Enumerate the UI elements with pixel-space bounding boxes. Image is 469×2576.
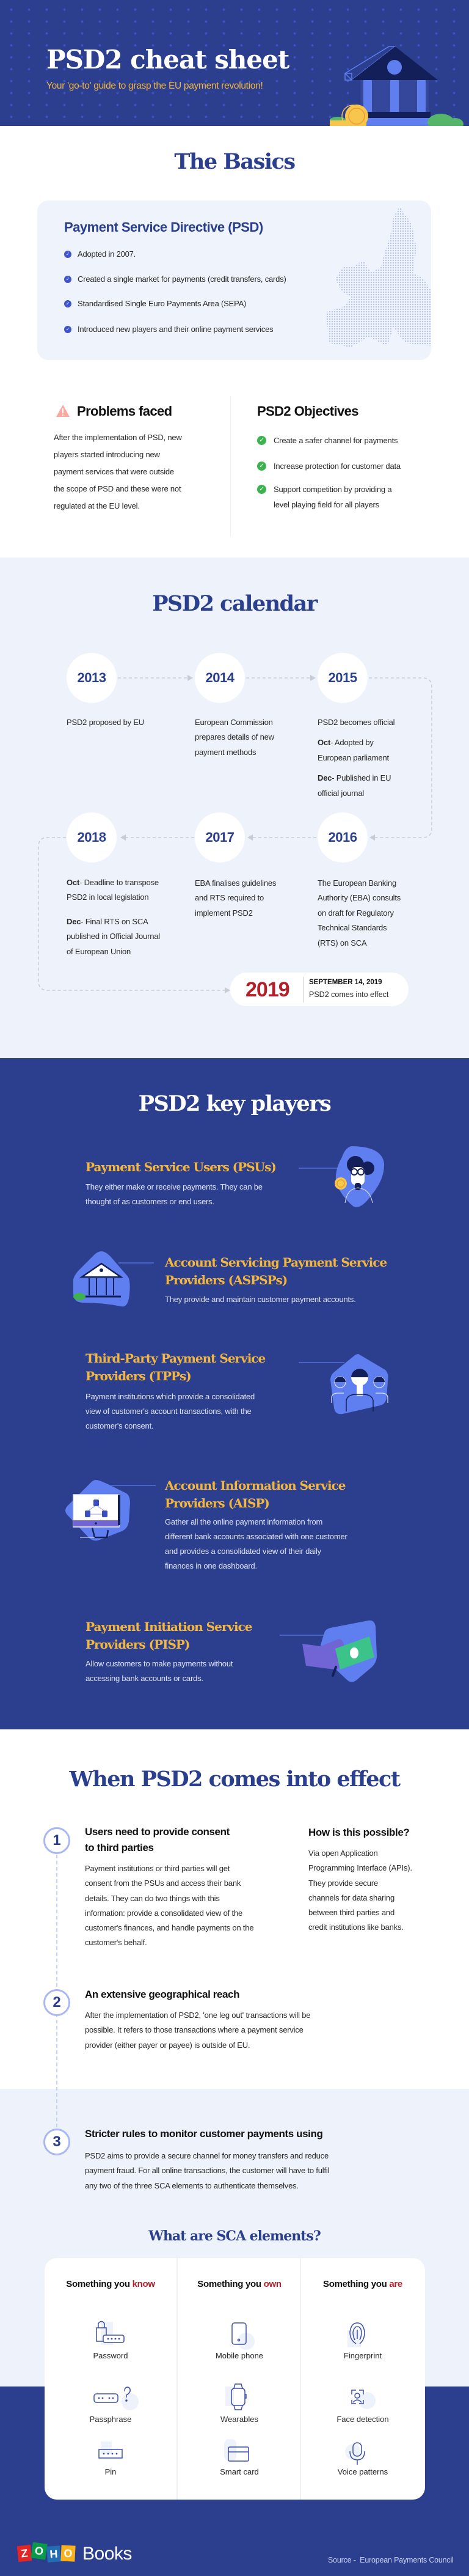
player: PISP: accessing bank accounts or cards.	[85, 1674, 203, 1683]
panel: PSD: ✓	[66, 301, 70, 306]
step 3	[43, 2128, 329, 2190]
password	[101, 2322, 113, 2345]
player: ASPSP	[73, 1251, 387, 1307]
panel: problems faced	[54, 403, 182, 510]
timeline connectors	[38, 675, 432, 993]
panel: PSD	[37, 201, 431, 360]
year 2015: 2015	[329, 670, 357, 685]
player: AISP: different bank accounts associated with one customer	[165, 1532, 347, 1541]
fingerprint	[347, 2330, 361, 2347]
section background: light lower	[0, 2089, 469, 2386]
objectives list	[257, 436, 401, 509]
text 2014: prepares details of new	[195, 732, 274, 742]
text 2018: PSD2 in local legislation Dec- Final RTS on SCA	[67, 892, 148, 926]
player: PSU: They either make or receive payments. They can be	[85, 1182, 263, 1191]
step 1: Payment institutions or third parties will get	[85, 1864, 230, 1873]
player: TPP	[85, 1351, 388, 1430]
text 2017: EBA finalises guidelines	[195, 878, 276, 888]
text: problems: After the implementation of PSD, new	[54, 433, 182, 442]
text 2018	[67, 878, 160, 956]
icon: monitor with network	[65, 1480, 130, 1540]
step 1: information: provide a consolidated view of the	[85, 1908, 242, 1918]
player: AISP: Providers (AISP)	[165, 1496, 269, 1511]
icon: dotted europe map	[327, 208, 431, 347]
footer band	[0, 2386, 469, 2576]
player: PISP: Allow customers to make payments without	[85, 1659, 233, 1668]
callout: how is this possible: They provide secure	[308, 1879, 378, 1888]
column: own: Something you own	[197, 2279, 282, 2289]
heading: when PSD2 comes into effect: When PSD2 comes into effect	[69, 1767, 400, 1792]
source note: Source - European Payments Council	[328, 2556, 454, 2564]
panel: PSD2 objectives: level playing field for all players	[274, 500, 379, 509]
callout: 2019: PSD2 comes into effect	[309, 990, 388, 999]
icon: warning	[56, 405, 70, 417]
player: AISP: Gather all the online payment information from	[165, 1517, 322, 1526]
heading: The Basics: The Basics	[174, 149, 295, 174]
text 2018: Oct- Deadline to transpose	[67, 878, 159, 887]
callout: how is this possible: Via open Application	[308, 1849, 378, 1858]
panel: PSD2 objectives: Increase protection for customer data	[274, 462, 401, 471]
panel: SCA elements card: Voice patterns	[338, 2467, 388, 2476]
year 2013	[67, 653, 117, 703]
face	[358, 2392, 376, 2409]
player: TPP: view of customer's account transactions, with the	[85, 1407, 252, 1416]
panel: SCA elements card: Passphrase	[90, 2415, 131, 2424]
text: problems: the scope of PSD and these were not	[54, 484, 181, 493]
step 3: any two of the three SCA elements to authenticate themselves.	[85, 2181, 299, 2190]
step 1: Users need to provide consent	[85, 1826, 230, 1838]
player: ASPSP: Providers (ASPSPs)	[165, 1273, 287, 1287]
heading: objectives: PSD2 Objectives	[257, 403, 358, 419]
panel: SCA elements card: Pin	[105, 2467, 116, 2476]
section: key players: customer's consent.	[85, 1421, 153, 1430]
PSD bullet list	[64, 249, 286, 334]
heading: what are SCA elements: What are SCA elements?	[148, 2228, 321, 2244]
player: PSU: thought of as customers or end users.	[85, 1197, 214, 1206]
text: problems: regulated at the EU level.	[54, 501, 140, 510]
callout: how is this possible: credit institutions like banks.	[308, 1923, 404, 1932]
heading: problems faced: Problems faced	[77, 403, 172, 419]
callout: 2019: SEPTEMBER 14, 2019	[309, 979, 382, 986]
logo: Zoho Books	[17, 2542, 132, 2564]
section: PSD2 calendar	[0, 558, 469, 1058]
voice	[345, 2444, 361, 2460]
wearable	[225, 2386, 234, 2406]
text 2017: implement PSD2	[195, 908, 253, 918]
dashed timeline	[56, 1855, 57, 2127]
icon: bank blob	[73, 1251, 130, 1307]
step 2	[43, 1989, 310, 2050]
text: problems: players started introducing new	[54, 450, 160, 459]
panel: PSD2 objectives: ✓	[259, 463, 264, 469]
panel: PSD: ✓	[66, 251, 70, 257]
year 2017: 2017	[206, 830, 234, 845]
text 2015: official journal	[318, 789, 364, 798]
heading: key players: PSD2 key players	[139, 1091, 330, 1116]
text 2018: of European Union	[67, 947, 131, 956]
year 2018	[67, 812, 117, 863]
text 2014: European Commission	[195, 718, 273, 727]
player: PISP	[85, 1619, 377, 1683]
text: problems	[54, 433, 182, 510]
year 2013: 2013	[78, 670, 106, 685]
year 2016	[318, 812, 368, 863]
panel: PSD: Standardised Single Euro Payments Area (SEPA)	[78, 299, 246, 308]
panel: SCA elements card: Fingerprint	[344, 2351, 382, 2360]
panel: SCA elements card: Mobile phone	[216, 2351, 263, 2360]
panel: SCA elements card: Wearables	[220, 2415, 258, 2424]
text 2014	[195, 718, 274, 757]
panel: PSD: Adopted in 2007.	[78, 249, 136, 259]
logo: Zoho Books: O	[34, 2544, 44, 2558]
step 1: 1	[53, 1832, 61, 1849]
player: TPP: Providers (TPPs)	[85, 1369, 191, 1383]
year 2015	[318, 653, 368, 703]
step 1: consent from the PSUs and access their bank	[85, 1879, 241, 1888]
player: PSU: Payment Service Users (PSUs)	[85, 1160, 276, 1174]
text 2015: European parliament Dec- Published in EU	[318, 753, 391, 782]
text 2015	[318, 718, 394, 798]
section: when PSD2 comes into effect	[0, 1729, 469, 2089]
player: PISP: Payment Initiation Service	[85, 1619, 252, 1634]
panel: PSD2 objectives	[257, 403, 401, 509]
callout: how is this possible: channels for data sharing	[308, 1893, 394, 1902]
year 2016: 2016	[329, 830, 357, 845]
step 1: to third parties	[85, 1842, 154, 1853]
panel: PSD2 objectives: ✓	[259, 437, 264, 444]
step 2: 2	[53, 1994, 61, 2011]
text 2016: (RTS) on SCA	[318, 938, 366, 948]
step 3: 3	[53, 2133, 61, 2150]
panel: SCA elements card	[45, 2258, 425, 2500]
step 1: details. They can do two things with this	[85, 1894, 220, 1903]
PSD title: Payment Service Directive (PSD)	[64, 219, 263, 235]
text 2016	[318, 878, 401, 948]
player: AISP: and provides a consolidated view of their daily	[165, 1547, 321, 1556]
player: PSU	[85, 1146, 384, 1207]
callout: 2019	[230, 973, 409, 1006]
text 2016: on draft for Regulatory	[318, 908, 394, 918]
subtitle: Your 'go-to' guide to grasp the EU payment revolution!	[46, 81, 263, 91]
header band	[0, 0, 469, 126]
player: PISP: Providers (PISP)	[85, 1637, 189, 1652]
text 2013: PSD2 proposed by EU	[67, 718, 144, 727]
step 1: customer's behalf.	[85, 1938, 147, 1947]
player: ASPSP: Account Servicing Payment Service	[165, 1255, 387, 1270]
player: AISP	[65, 1478, 347, 1570]
year 2018: 2018	[78, 830, 106, 845]
section: key players	[0, 1058, 469, 1729]
player: TPP: Third-Party Payment Service	[85, 1351, 265, 1366]
divider	[230, 396, 231, 537]
panel: PSD: ✓	[66, 276, 70, 282]
column: know: Something you know	[66, 2279, 155, 2289]
icon: bank with coin	[330, 46, 464, 126]
step 2: provider (either payer or payee) is outside of EU.	[85, 2041, 250, 2050]
step 3: Stricter rules to monitor customer payments using	[85, 2128, 322, 2140]
text 2016: Technical Standards	[318, 923, 387, 932]
icon: group of people	[330, 1354, 388, 1415]
player: AISP: Account Information Service	[165, 1478, 346, 1493]
icon: user with coin	[335, 1146, 384, 1207]
callout: how is this possible: Programming Interface (APIs).	[308, 1863, 412, 1872]
panel: PSD2 objectives: Support competition by providing a	[274, 485, 391, 494]
logo: Zoho Books: H	[49, 2548, 58, 2560]
player: AISP: finances in one dashboard.	[165, 1561, 257, 1570]
passphrase	[122, 2393, 139, 2410]
text: problems: payment services that were outside	[54, 467, 174, 476]
pin	[101, 2442, 112, 2454]
text 2017: and RTS required to	[195, 893, 264, 902]
callout: how is this possible: between third parties and	[308, 1908, 394, 1917]
text 2016: The European Banking	[318, 878, 396, 888]
step 3: PSD2 aims to provide a secure channel for money transfers and reduce	[85, 2151, 329, 2160]
smart card	[224, 2439, 236, 2461]
step 1	[43, 1826, 253, 1947]
mobile	[238, 2333, 255, 2350]
panel: PSD: Created a single market for payments (credit transfers, cards)	[78, 274, 286, 284]
icons	[93, 2320, 376, 2465]
player: TPP: Payment institutions which provide a consolidated	[85, 1392, 255, 1401]
player: ASPSP: They provide and maintain customer payment accounts.	[165, 1295, 356, 1304]
text 2016: Authority (EBA) consults	[318, 893, 401, 902]
year 2017	[195, 812, 245, 863]
title: PSD2 cheat sheet	[46, 45, 289, 75]
text 2017	[195, 878, 276, 918]
section: the basics	[37, 153, 431, 537]
panel: PSD: ✓	[66, 326, 70, 332]
year 2014: 2014	[206, 670, 234, 685]
panel: SCA elements card: Smart card	[220, 2467, 259, 2476]
panel: SCA elements card: Face detection	[336, 2415, 389, 2424]
callout: 2019: 2019	[245, 978, 289, 1001]
column: are: Something you are	[323, 2279, 402, 2289]
logo: Zoho Books: O	[64, 2547, 73, 2559]
panel: PSD: Introduced new players and their online payment services	[78, 325, 273, 334]
labels: Password	[93, 2351, 128, 2360]
logo: Zoho Books: Books	[82, 2544, 132, 2564]
callout: how is this possible	[308, 1827, 412, 1932]
step 3: payment fraud. For all online transactions, the customer will have to fulfil	[85, 2166, 329, 2175]
text 2014: payment methods	[195, 748, 256, 757]
panel: PSD2 objectives: ✓	[259, 486, 264, 493]
logo: Zoho Books: Z	[20, 2547, 29, 2560]
callout: how is this possible: How is this possible?	[308, 1827, 409, 1838]
panel: PSD2 objectives: Create a safer channel for payments	[274, 436, 398, 445]
step 2: An extensive geographical reach	[85, 1989, 239, 2000]
text 2015: PSD2 becomes official Oct- Adopted by	[318, 718, 394, 747]
year 2014	[195, 653, 245, 703]
icon: hand with cash	[302, 1620, 377, 1682]
step 2: After the implementation of PSD2, 'one leg out' transactions will be	[85, 2011, 310, 2020]
step 2: possible. It refers to those transactions where a payment service	[85, 2025, 304, 2034]
heading: calendar: PSD2 calendar	[152, 591, 317, 616]
text 2018: published in Official Journal	[67, 932, 160, 941]
step 1: customer's finances, and handle payments on the	[85, 1923, 253, 1932]
